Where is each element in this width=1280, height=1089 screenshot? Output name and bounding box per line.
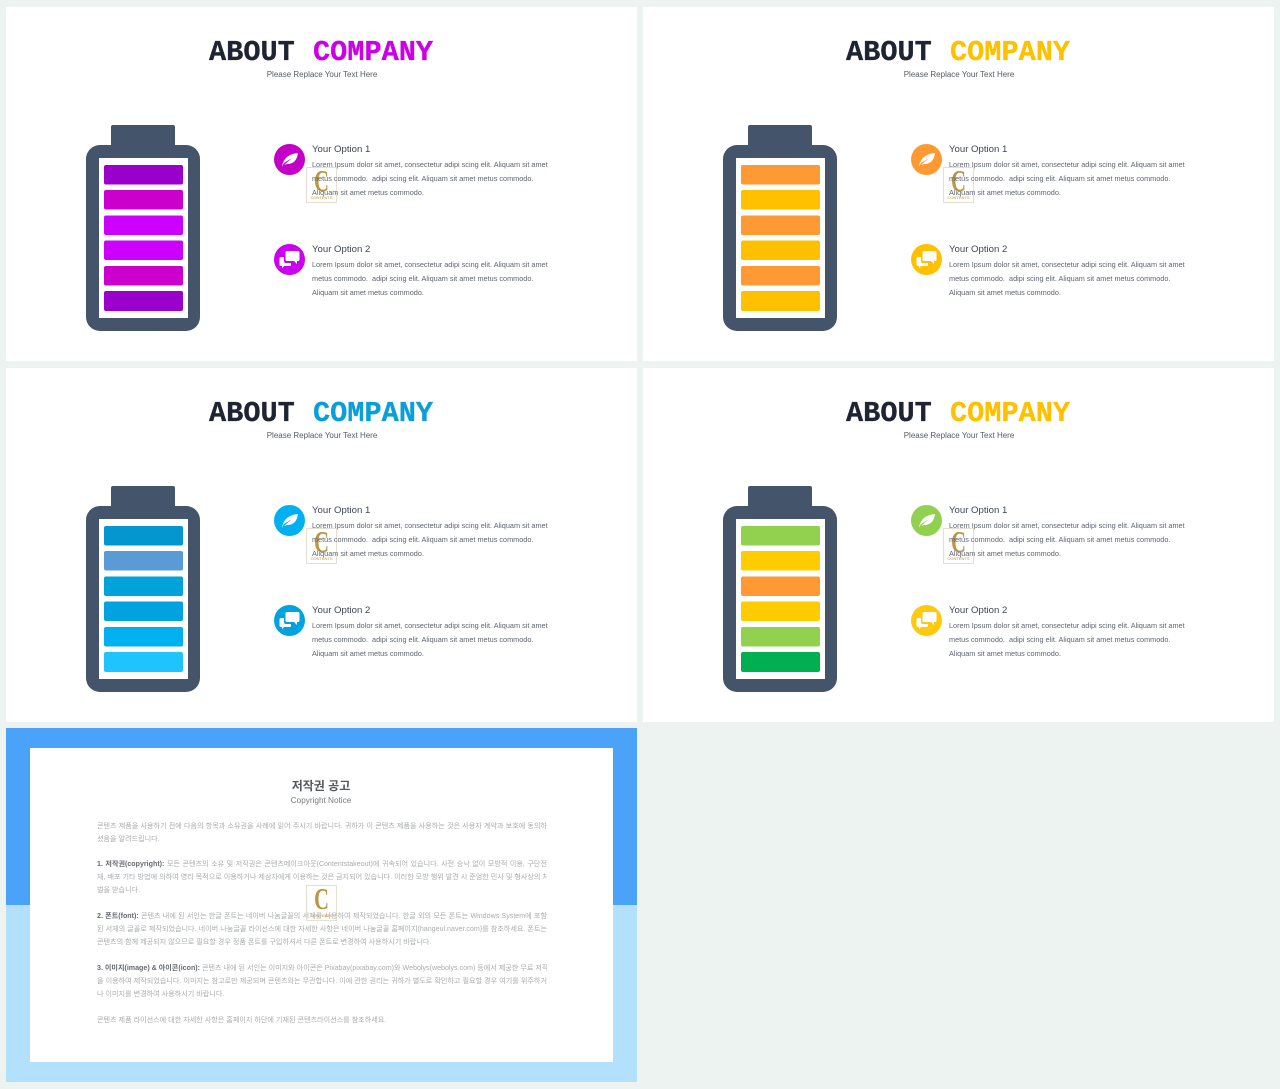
icon: speech bubbles [911,605,942,636]
option text: Lorem Ipsum dolor sit amet, consectetur adipi scing elit. Aliquam sit amet [312,160,548,169]
intro paragraph line 2: 셨음을 알려드립니다. [97,835,160,843]
icon: leaf [911,144,942,175]
panel: orange battery slide [643,7,1274,361]
option text [312,260,548,297]
section 2 line 3: 콘텐츠의 함께 제공되지 않으므로 필요할 경우 정품 폰트를 구입하셔서 다른 폰트로 변경하여 사용하시기 바랍니다. [97,938,431,946]
option text: Lorem Ipsum dolor sit amet, consectetur adipi scing elit. Aliquam sit amet [949,260,1185,269]
option text [312,521,548,558]
subtitle: Please Replace Your Text Here [267,431,377,440]
option text: Lorem Ipsum dolor sit amet, consectetur adipi scing elit. Aliquam sit amet [312,521,548,530]
option text [949,521,1185,558]
watermark logo [306,885,337,921]
option text: Aliquam sit amet metus commodo. [949,288,1061,297]
title: ABOUT COMPANY [846,36,1070,69]
closing note: 콘텐츠 제품 라이선스에 대한 자세한 사항은 홈페이지 하단에 기재된 콘텐츠라이선스를 참조하세요. [97,1016,386,1024]
icon: speech bubbles [274,244,305,275]
intro paragraph: 콘텐츠 제품을 사용하기 전에 다음의 항목과 소유권을 사례에 읽어 주시기 바랍니다. 귀하가 이 콘텐츠 제품을 사용하는 것은 사용자 계약과 보호에 동의하 [97,822,547,830]
option 2 [274,244,548,297]
section 2: font: 2. 폰트(font): 콘텐츠 내에 된 서인는 한글 폰트는 네이버 나눔글꼴의 서체를 사용하여 제작되었습니다. 한글 외의 모든 폰트는 Windows System에 포함 [97,912,547,920]
notice subheading: Copyright Notice [291,796,351,805]
option text: metus commodo. adipi scing elit. Aliquam sit amet metus commodo. [312,174,533,183]
option text: Lorem Ipsum dolor sit amet, consectetur adipi scing elit. Aliquam sit amet [949,160,1185,169]
option text: Aliquam sit amet metus commodo. [312,549,424,558]
option 2 [911,244,1185,297]
option text: Lorem Ipsum dolor sit amet, consectetur adipi scing elit. Aliquam sit amet [312,260,548,269]
watermark logo [943,528,974,564]
option text: Aliquam sit amet metus commodo. [312,649,424,658]
option heading: Your Option 2 [949,244,1007,255]
battery chart [86,486,200,692]
battery chart [723,125,837,331]
option 1 [911,144,1185,197]
battery chart [723,486,837,692]
option 1 [274,505,548,558]
option heading: Your Option 2 [312,605,370,616]
option text: Aliquam sit amet metus commodo. [312,288,424,297]
panel: purple battery slide [6,7,637,361]
section 3: image and icon: 3. 이미지(image) & 아이콘(icon): 콘텐츠 내에 된 서인는 이미지와 아이콘은 Pixabay(pixabay.com)와 Webolys(webolys.com) 등에서 제공한 무료 저작물 [97,964,547,972]
notice heading: 저작권 공고 [292,779,350,793]
option text: Aliquam sit amet metus commodo. [949,649,1061,658]
watermark logo: CONTENTS [310,556,332,561]
option text: metus commodo. adipi scing elit. Aliquam sit amet metus commodo. [949,535,1170,544]
option text: Aliquam sit amet metus commodo. [312,188,424,197]
option text: Aliquam sit amet metus commodo. [949,188,1061,197]
option heading: Your Option 1 [312,505,370,516]
option heading: Your Option 1 [949,505,1007,516]
option 1 [911,505,1185,558]
section 1 line 2: 재, 배포 기타 방법에 의하여 영리 목적으로 이용하거나 제삼자에게 이용하는 것은 금지되어 있습니다. 이러한 모방 행위 발견 시 준엄한 민사 및 형사상의 처 [97,873,547,881]
notice card [30,748,613,1062]
watermark logo [306,528,337,564]
option text: Lorem Ipsum dolor sit amet, consectetur adipi scing elit. Aliquam sit amet [949,521,1185,530]
watermark logo [943,167,974,203]
title: ABOUT COMPANY [846,397,1070,430]
option text: metus commodo. adipi scing elit. Aliquam sit amet metus commodo. [312,274,533,283]
watermark logo: CONTENTS [310,195,332,200]
watermark logo [306,167,337,203]
icon: speech bubbles [911,244,942,275]
section 3 line 2: 을 이용하여 제작되었습니다. 이미지는 참고로만 제공되며 콘텐츠와는 무관합니다. 이에 관한 권리는 귀하가 별도로 확인하고 필요할 경우 여기를 위주하거 [97,977,547,985]
panel: blue battery slide [6,368,637,722]
option text [949,621,1185,658]
icon: leaf [274,505,305,536]
option text: metus commodo. adipi scing elit. Aliquam sit amet metus commodo. [312,535,533,544]
section 3 line 3: 나 이미지를 변경하여 사용하시기 바랍니다. [97,990,224,998]
option 1 [274,144,548,197]
panel: copyright notice [6,728,637,1082]
watermark logo: CONTENTS [948,195,970,200]
option text: Aliquam sit amet metus commodo. [949,549,1061,558]
section 1: copyright: 1. 저작권(copyright): 모든 콘텐츠의 소유 및 저작권은 콘텐츠메이크아웃(Contentstakeout)에 귀속되어 있습니다. 사전 승낙 없이 모방적 이용, 구단전 [97,860,547,868]
option text: Lorem Ipsum dolor sit amet, consectetur adipi scing elit. Aliquam sit amet [949,621,1185,630]
option text: metus commodo. adipi scing elit. Aliquam sit amet metus commodo. [949,174,1170,183]
title: ABOUT COMPANY [209,36,433,69]
option text: Lorem Ipsum dolor sit amet, consectetur adipi scing elit. Aliquam sit amet [312,621,548,630]
option text: metus commodo. adipi scing elit. Aliquam sit amet metus commodo. [949,635,1170,644]
option heading: Your Option 2 [949,605,1007,616]
icon: leaf [911,505,942,536]
option heading: Your Option 1 [312,144,370,155]
section 2 line 2: 된 서체의 글꼴로 제작되었습니다. 네이버 나눔글꼴 라이선스에 대한 자세한 사항은 네이버 나눔글꼴 홈페이지(hangeul.naver.com)를 참조하세요. 폰트는 [97,925,547,933]
panel: multicolour battery slide [643,368,1274,722]
watermark logo: CONTENTS [310,913,332,918]
icon: speech bubbles [274,605,305,636]
subtitle: Please Replace Your Text Here [904,70,1014,79]
option 2 [274,605,548,658]
subtitle: Please Replace Your Text Here [267,70,377,79]
option text: metus commodo. adipi scing elit. Aliquam sit amet metus commodo. [949,274,1170,283]
option heading: Your Option 2 [312,244,370,255]
option text [312,621,548,658]
section 1 line 3: 벌을 받습니다. [97,886,140,894]
option 2 [911,605,1185,658]
title: ABOUT COMPANY [209,397,433,430]
icon: leaf [274,144,305,175]
subtitle: Please Replace Your Text Here [904,431,1014,440]
battery chart [86,125,200,331]
option text: metus commodo. adipi scing elit. Aliquam sit amet metus commodo. [312,635,533,644]
watermark logo: CONTENTS [948,556,970,561]
option text [949,160,1185,197]
option text [312,160,548,197]
option text [949,260,1185,297]
option heading: Your Option 1 [949,144,1007,155]
